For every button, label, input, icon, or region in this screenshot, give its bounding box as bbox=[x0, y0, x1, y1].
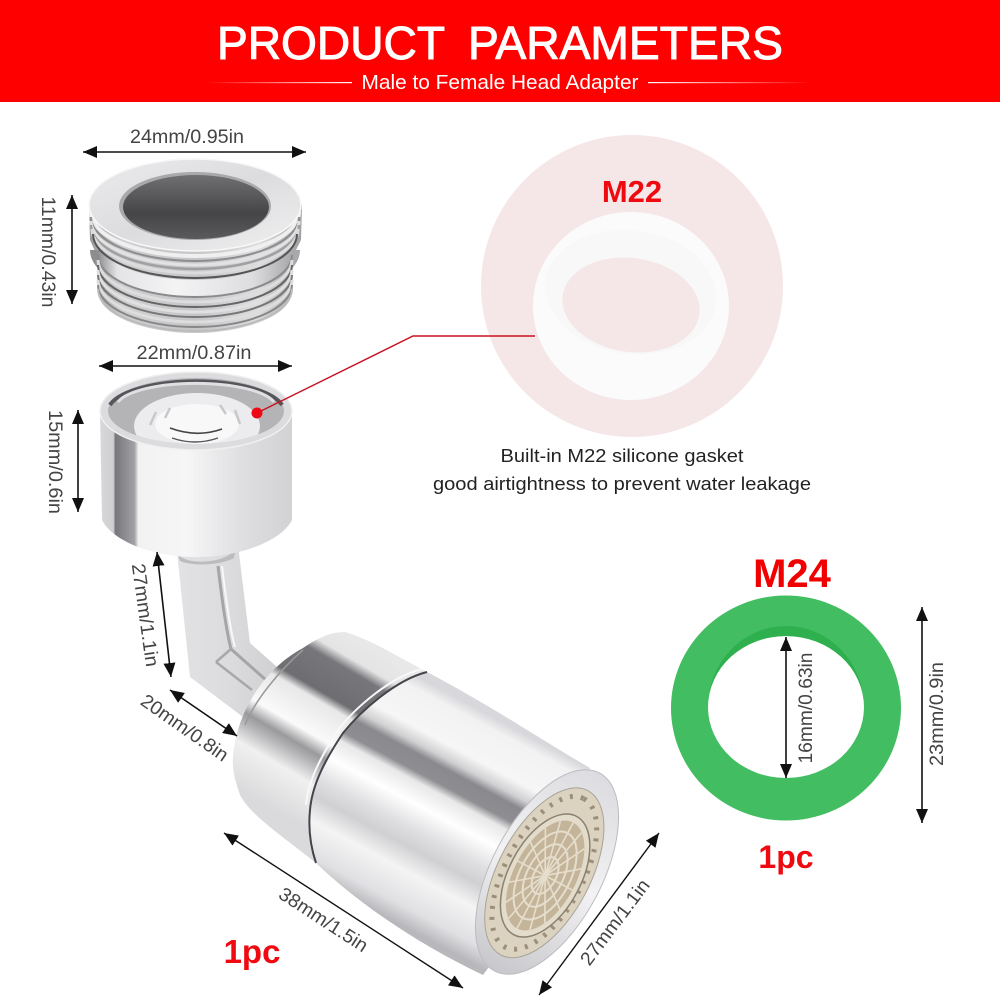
quantity label: aerator: 1pc bbox=[224, 933, 280, 970]
part: female connector bbox=[100, 372, 292, 557]
dimension: 27mm stem bbox=[127, 552, 171, 677]
dimension: 20mm elbow: 20mm/0.8in bbox=[136, 691, 232, 766]
dimension: 27mm stem: 27mm/1.1in bbox=[127, 562, 162, 668]
dimension: 24mm width: 24mm/0.95in bbox=[130, 127, 244, 148]
seam bbox=[309, 672, 427, 863]
dimension: 23mm outer: 23mm/0.9in bbox=[927, 662, 948, 766]
leader line from connector to gasket bbox=[252, 336, 535, 418]
gasket description: Built-in M22 silicone gasket bbox=[500, 446, 744, 466]
M22 label: M22 bbox=[602, 174, 662, 209]
dimension: 16mm inner: 16mm/0.63in bbox=[796, 652, 817, 764]
body back section bbox=[233, 632, 427, 863]
part: male thread adapter bbox=[89, 159, 302, 333]
dimension: 38mm length: 38mm/1.5in bbox=[275, 884, 371, 957]
white silicone gasket bbox=[533, 212, 729, 400]
dimension: 38mm length bbox=[224, 833, 463, 988]
gasket description: good airtightness to prevent water leakage bbox=[433, 474, 811, 494]
quantity label: washer: 1pc bbox=[758, 839, 814, 875]
dimension: 11mm height: 11mm/0.43in bbox=[37, 196, 58, 308]
gasket description bbox=[433, 446, 811, 494]
M24 label: M24 bbox=[753, 552, 832, 596]
header banner bbox=[0, 0, 1000, 102]
dimension: 15mm height: 15mm/0.6in bbox=[44, 410, 65, 514]
part: filter mesh inside connector bbox=[134, 393, 260, 444]
dimension: 27mm diameter bbox=[539, 833, 659, 995]
title bbox=[217, 17, 783, 69]
nozzle face bbox=[446, 747, 648, 997]
dimension: 15mm height bbox=[44, 410, 78, 514]
panel: M22 gasket callout bbox=[481, 135, 783, 437]
subtitle: Male to Female Head Adapter bbox=[362, 71, 639, 94]
title: PARAMETERS bbox=[468, 17, 783, 69]
green M24 washer bbox=[671, 596, 901, 820]
part: swivel stem bbox=[177, 545, 277, 717]
body front section bbox=[309, 672, 590, 975]
swivel aerator body bbox=[233, 632, 648, 997]
title: PRODUCT bbox=[217, 17, 445, 69]
dimension: 27mm diameter: 27mm/1.1in bbox=[577, 876, 655, 970]
dimension: 11mm height bbox=[37, 195, 72, 308]
dimension: 22mm width: 22mm/0.87in bbox=[136, 343, 252, 364]
